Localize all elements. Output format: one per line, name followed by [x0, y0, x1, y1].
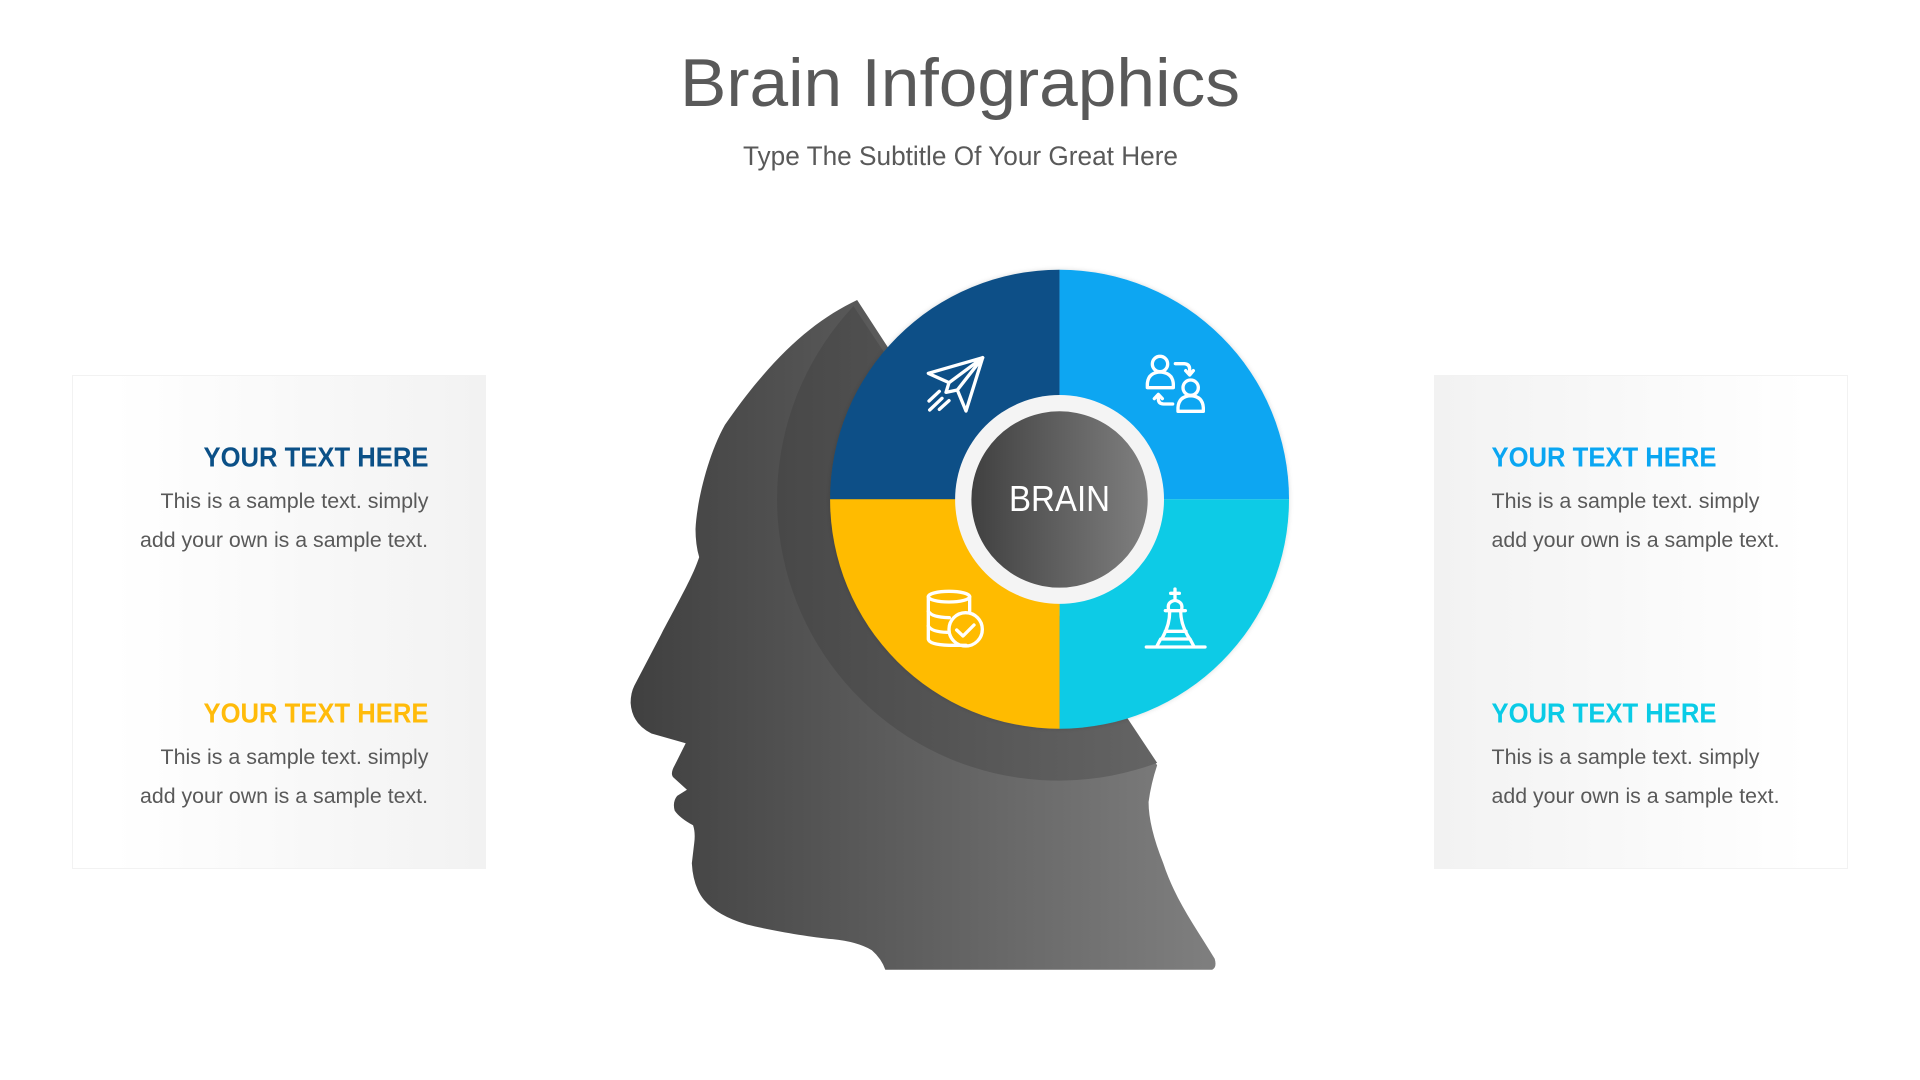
head silhouette [631, 300, 1216, 970]
left body 2: add your own is a sample text. [140, 784, 428, 808]
icon: chess king [1146, 589, 1205, 647]
left heading 1: YOUR TEXT HERE [204, 442, 428, 472]
right body 2: This is a sample text. simply [1492, 745, 1760, 769]
icon: people exchange [1147, 356, 1203, 411]
panel: right [1434, 376, 1848, 868]
title: Brain Infographics [680, 45, 1240, 121]
left body 1: add your own is a sample text. [140, 528, 428, 552]
shaded half disc behind the donut [777, 306, 1157, 781]
segment: navy [830, 270, 1060, 499]
panel: left [72, 376, 486, 868]
left heading 2: YOUR TEXT HERE [204, 698, 428, 728]
right body 1 [1492, 489, 1780, 552]
right body 1: add your own is a sample text. [1492, 528, 1780, 552]
center ring [955, 395, 1164, 604]
right heading 1: YOUR TEXT HERE [1492, 442, 1716, 472]
right heading 2: YOUR TEXT HERE [1492, 698, 1716, 728]
head silhouette with donut diagram [631, 270, 1289, 970]
segment: amber [830, 499, 1060, 729]
left body 1 [140, 489, 429, 552]
right body 2 [1492, 745, 1780, 808]
left body 2 [140, 745, 429, 808]
center core [971, 411, 1148, 588]
left body 1: This is a sample text. simply [160, 489, 429, 513]
segment: cyan [1060, 499, 1289, 729]
donut chart [830, 270, 1289, 729]
center label: BRAIN [1009, 478, 1110, 519]
subtitle: Type The Subtitle Of Your Great Here [743, 141, 1178, 171]
icon: database check [928, 591, 982, 646]
right body 2: add your own is a sample text. [1492, 784, 1780, 808]
left body 2: This is a sample text. simply [160, 745, 429, 769]
icon: paper plane [928, 358, 983, 411]
right body 1: This is a sample text. simply [1492, 489, 1760, 513]
segment: blue [1060, 270, 1289, 499]
